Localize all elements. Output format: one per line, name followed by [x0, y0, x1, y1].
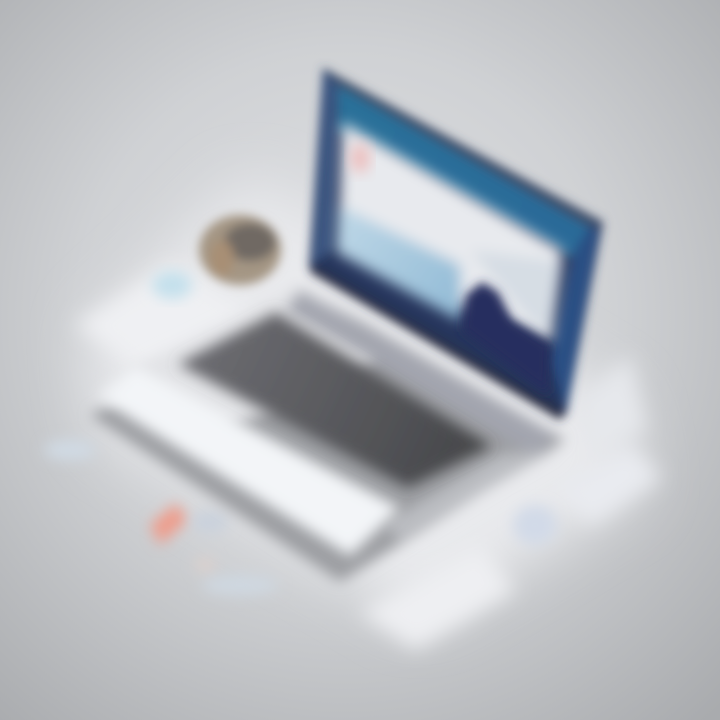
icon: light blue shape	[152, 271, 192, 299]
screen red accent	[350, 143, 370, 173]
screen dark hills	[462, 282, 550, 395]
scattered pale marks	[44, 440, 557, 595]
laptop	[90, 68, 603, 582]
laptop base	[90, 285, 565, 582]
screen window	[336, 122, 562, 342]
laptop screen	[309, 68, 603, 420]
icon: coffee cup	[199, 215, 281, 285]
paper sheets under laptop	[75, 265, 662, 650]
icon: orange note	[150, 503, 188, 545]
keyboard	[178, 312, 492, 488]
white palm rest band	[98, 366, 400, 556]
soft white glow behind laptop	[90, 180, 640, 620]
